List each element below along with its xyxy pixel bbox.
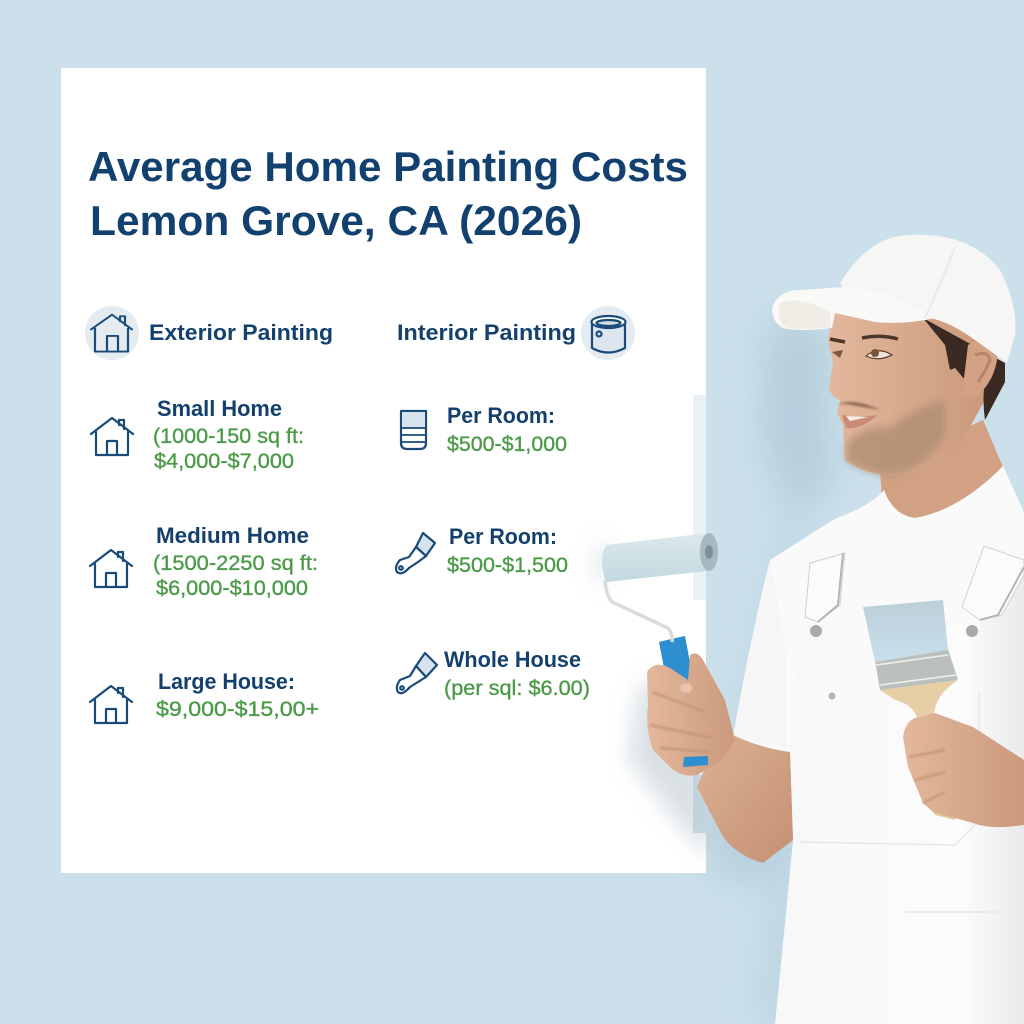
left hand <box>647 653 735 776</box>
paint brush <box>863 600 958 820</box>
t-shirt <box>733 466 1024 880</box>
icon: paint can <box>592 316 626 352</box>
eye and brow <box>830 336 898 342</box>
t-shirt sleeve shading <box>733 560 787 748</box>
overalls <box>775 570 1024 1024</box>
title <box>88 143 688 244</box>
roller wire <box>605 580 672 642</box>
cost item: per room paintbrush <box>396 524 568 577</box>
cost item: small home: $4,000-$7,000 <box>154 450 294 473</box>
cost item: per room brush head <box>401 403 567 456</box>
neck <box>880 420 1003 545</box>
cost item: per room paintbrush: $500-$1,500 <box>447 554 568 577</box>
mouth <box>842 415 878 428</box>
roller cover <box>602 533 718 582</box>
cost item: per room brush head: Per Room: <box>447 403 555 428</box>
cost item: per room paintbrush: Per Room: <box>449 524 557 549</box>
cost item: medium home <box>90 523 318 600</box>
roller shadow on panel <box>596 545 712 860</box>
cost item: whole house: Whole House <box>444 647 581 672</box>
cost item: medium home: $6,000-$10,000 <box>156 577 308 600</box>
panel: white cost card <box>61 68 706 873</box>
roller handle <box>659 636 708 767</box>
left strap <box>805 553 845 700</box>
right strap <box>962 546 1024 637</box>
column header: interior painting <box>397 306 635 360</box>
cost item: small home: (1000-150 sq ft: <box>153 425 304 448</box>
head <box>828 305 1005 476</box>
cap <box>772 235 1015 363</box>
cost item: medium home: Medium Home <box>156 523 309 548</box>
icon: brush head <box>401 411 426 449</box>
cost item: large house <box>90 669 319 723</box>
title: Average Home Painting Costs <box>88 143 688 190</box>
icon: paintbrush <box>396 533 435 573</box>
cost item: small home: Small Home <box>157 396 282 421</box>
icon: house in badge <box>91 315 132 352</box>
person shadow on wall <box>706 320 835 1024</box>
icon: house <box>90 550 132 587</box>
cost item: whole house <box>397 647 590 700</box>
cost item: per room brush head: $500-$1,000 <box>447 433 567 456</box>
icon: paintbrush <box>397 653 437 693</box>
cost item: medium home: (1500-2250 sq ft: <box>153 552 318 575</box>
beard <box>846 400 945 476</box>
title: Lemon Grove, CA (2026) <box>90 197 582 244</box>
painter figure <box>602 235 1024 1024</box>
cost item: whole house: (per sql: $6.00) <box>444 677 590 700</box>
right hand <box>903 713 1024 827</box>
ear <box>962 341 998 398</box>
column header: exterior painting <box>85 306 333 360</box>
hair <box>923 318 1005 420</box>
cost item: large house: Large House: <box>158 669 295 694</box>
overall bib pocket line <box>800 693 979 845</box>
forearm <box>697 735 793 863</box>
cost item: large house: $9,000-$15,00+ <box>156 698 319 721</box>
column header: exterior painting: Exterior Painting <box>149 320 333 345</box>
column header: interior painting: Interior Painting <box>397 320 576 345</box>
icon: house <box>90 686 132 723</box>
icon: house <box>91 418 133 455</box>
cost item: small home <box>91 396 304 473</box>
